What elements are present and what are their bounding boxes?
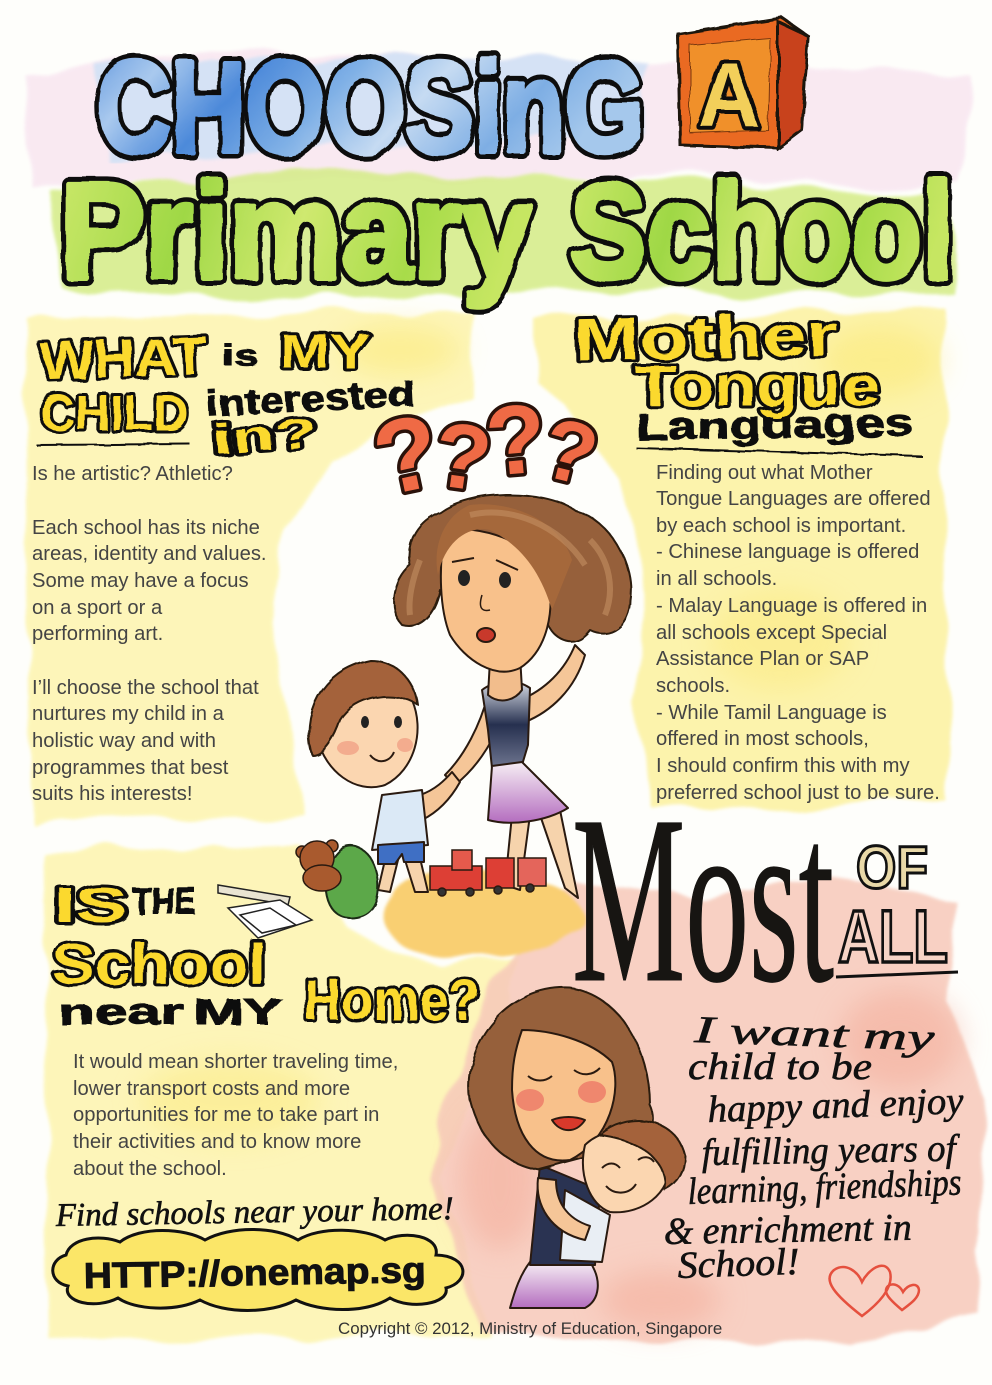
blush bbox=[516, 1081, 606, 1111]
mother skirt bbox=[488, 762, 568, 823]
text: child interests: on a sport or a bbox=[32, 597, 163, 619]
mother legs bbox=[505, 810, 578, 898]
text: near home: lower transport costs and more bbox=[73, 1078, 350, 1100]
text: I want my child to be happy: I want my bbox=[692, 1009, 935, 1059]
heading: what is my child interested in: in? bbox=[211, 409, 318, 463]
child blush bbox=[337, 738, 413, 755]
text: near home: their activities and to know more bbox=[73, 1131, 361, 1153]
text: mother tongue languages: - While Tamil Language is bbox=[656, 702, 887, 724]
illustration: mother and child bbox=[309, 494, 631, 898]
text: mother tongue languages: preferred school just to be sure. bbox=[656, 782, 940, 804]
heading: Most of all: OF bbox=[856, 834, 928, 901]
heading: what is my child interested in: interested bbox=[205, 372, 415, 424]
text: I want my child to be happy: School! bbox=[677, 1241, 800, 1287]
child mouth bbox=[370, 752, 394, 761]
text: child interests: Each school has its niche bbox=[32, 517, 260, 539]
child eyes bbox=[361, 716, 402, 728]
panel: yellow bottom-left wash bbox=[42, 845, 520, 1340]
heading: is the school near my home: School bbox=[52, 932, 266, 997]
child shirt bbox=[560, 1190, 610, 1262]
title: Primary School: Primary bbox=[60, 155, 532, 307]
heading: what is my child interested in: is bbox=[222, 339, 258, 372]
text: I want my child to be happy: child to be bbox=[688, 1046, 872, 1088]
child closed eyes and smile bbox=[602, 1157, 654, 1193]
text: mother tongue languages: offered in most schools, bbox=[656, 728, 869, 750]
dress bbox=[530, 1165, 600, 1265]
callout: onemap cloud bbox=[53, 1230, 463, 1310]
icon: letter block A: A bbox=[698, 44, 760, 146]
hair highlights bbox=[409, 512, 610, 615]
heading: is the school near my home bbox=[52, 877, 480, 1033]
child shorts bbox=[378, 842, 424, 864]
mother mouth bbox=[477, 628, 495, 642]
mother dress top bbox=[482, 681, 530, 768]
heading: mother tongue languages: Languages bbox=[635, 402, 914, 449]
mother hair fringe bbox=[437, 504, 572, 610]
icon: toy train bbox=[430, 850, 546, 896]
mother hair bbox=[469, 988, 653, 1170]
icon: question marks: ? bbox=[481, 382, 551, 497]
icon: hearts bbox=[830, 1266, 919, 1316]
heading: mother tongue languages bbox=[573, 301, 922, 456]
icon: question marks: ? bbox=[428, 403, 497, 512]
heading: is the school near my home: THE bbox=[132, 881, 196, 923]
text: near home bbox=[73, 1051, 398, 1180]
icon: question marks: ? bbox=[364, 392, 450, 519]
icon: green backpack bbox=[326, 846, 378, 918]
panel: yellow left wash bbox=[26, 308, 470, 822]
mother face bbox=[441, 529, 551, 672]
title: Primary School: Primary bbox=[60, 155, 532, 307]
mother neck bbox=[488, 655, 522, 700]
text: child interests: holistic way and with bbox=[32, 730, 216, 752]
text: child interests: suits his interests! bbox=[32, 783, 192, 805]
panel: yellow right wash bbox=[535, 308, 945, 812]
text: mother tongue languages bbox=[656, 462, 940, 804]
heading: what is my child interested in: WHAT bbox=[38, 326, 208, 392]
text: mother tongue languages: all schools except Special bbox=[656, 622, 887, 644]
text: copyright: Copyright © 2012, Ministry of Education, Singapore bbox=[338, 1319, 722, 1338]
text: I want my child to be happy bbox=[663, 1009, 964, 1287]
text: mother tongue languages: - Malay Language is offered in bbox=[656, 595, 927, 617]
heading: what is my child interested in: CHILD bbox=[40, 385, 188, 441]
title: Choosing: CHOOSinG bbox=[97, 34, 645, 180]
icon: question marks bbox=[364, 382, 607, 519]
mother lower arm bbox=[445, 695, 505, 785]
title: Choosing: CHOOSinG bbox=[97, 34, 645, 180]
heading: is the school near my home: MY bbox=[194, 991, 282, 1032]
text: near home: about the school. bbox=[73, 1158, 227, 1180]
text: child interests: nurtures my child in a bbox=[32, 703, 225, 725]
icon: books and ruler bbox=[218, 885, 312, 938]
text: child interests: Is he artistic? Athletic? bbox=[32, 463, 233, 485]
child shirt bbox=[372, 790, 428, 850]
background wash: pink title band bbox=[22, 50, 970, 190]
text: I want my child to be happy: & enrichment in bbox=[663, 1207, 912, 1253]
heading: is the school near my home: Home? bbox=[304, 968, 480, 1033]
heading: what is my child interested in bbox=[36, 326, 415, 463]
icon: teddy bear bbox=[296, 840, 341, 891]
text: child interests: programmes that best bbox=[32, 757, 229, 779]
child head bbox=[318, 682, 418, 787]
mother face bbox=[512, 1030, 615, 1161]
mouth bbox=[552, 1117, 585, 1130]
text: child interests bbox=[32, 463, 267, 805]
skirt bbox=[510, 1262, 598, 1308]
icon: letter block A bbox=[678, 18, 808, 148]
decorative mottling in washes bbox=[140, 325, 960, 1330]
background wash: green title band bbox=[50, 172, 955, 298]
child hair bbox=[309, 660, 418, 755]
illustration: floor shadow bbox=[380, 871, 580, 959]
text: mother tongue languages: I should confirm this with my bbox=[656, 755, 910, 777]
text: child interests: I’ll choose the school that bbox=[32, 677, 259, 699]
child legs bbox=[378, 858, 428, 892]
mother brows bbox=[452, 558, 518, 570]
mother hair bbox=[394, 494, 631, 641]
panel: pink bottom-right wash bbox=[430, 880, 985, 1345]
child hair bbox=[600, 1121, 685, 1190]
heading: is the school near my home: near bbox=[58, 991, 184, 1032]
text: mother tongue languages: in all schools. bbox=[656, 568, 777, 590]
text: child interests: performing art. bbox=[32, 623, 163, 645]
illustration: hugging mother and child bbox=[469, 988, 685, 1308]
mother raised arm bbox=[520, 645, 585, 722]
title: Primary School bbox=[60, 155, 954, 307]
mother eyes bbox=[458, 570, 511, 588]
closed eyes bbox=[528, 1068, 600, 1080]
mother nose bbox=[480, 595, 490, 610]
text: I want my child to be happy: happy and enjoy bbox=[707, 1080, 964, 1131]
callout: onemap cloud: HTTP://onemap.sg bbox=[83, 1249, 426, 1296]
heading: is the school near my home: IS bbox=[54, 877, 128, 933]
text: child interests: Some may have a focus bbox=[32, 570, 249, 592]
heading: what is my child interested in: MY bbox=[280, 326, 370, 379]
background wash: blue title bbox=[96, 54, 645, 158]
text: near home: It would mean shorter traveling time, bbox=[73, 1051, 398, 1073]
text: mother tongue languages: by each school is important. bbox=[656, 515, 906, 537]
heading: mother tongue languages: Mother bbox=[573, 301, 838, 373]
text: near home: opportunities for me to take part in bbox=[73, 1104, 379, 1126]
text: child interests: areas, identity and values. bbox=[32, 543, 267, 565]
text: mother tongue languages: Tongue Languages are offered bbox=[656, 488, 931, 510]
hug arm bbox=[538, 1178, 590, 1240]
child arm bbox=[420, 772, 460, 820]
text: find schools near your home: Find schools near your home! bbox=[55, 1191, 454, 1234]
text: I want my child to be happy: fulfilling years of bbox=[701, 1127, 960, 1174]
text: mother tongue languages: Finding out what Mother bbox=[656, 462, 873, 484]
text: mother tongue languages: schools. bbox=[656, 675, 730, 697]
heading: mother tongue languages: Tongue bbox=[634, 354, 880, 419]
icon: question marks: ? bbox=[533, 399, 607, 505]
text: mother tongue languages: Assistance Plan or SAP bbox=[656, 648, 869, 670]
text: mother tongue languages: - Chinese language is offered bbox=[656, 541, 919, 563]
heading: Most of all: ALL bbox=[838, 895, 948, 978]
child head bbox=[583, 1131, 670, 1212]
